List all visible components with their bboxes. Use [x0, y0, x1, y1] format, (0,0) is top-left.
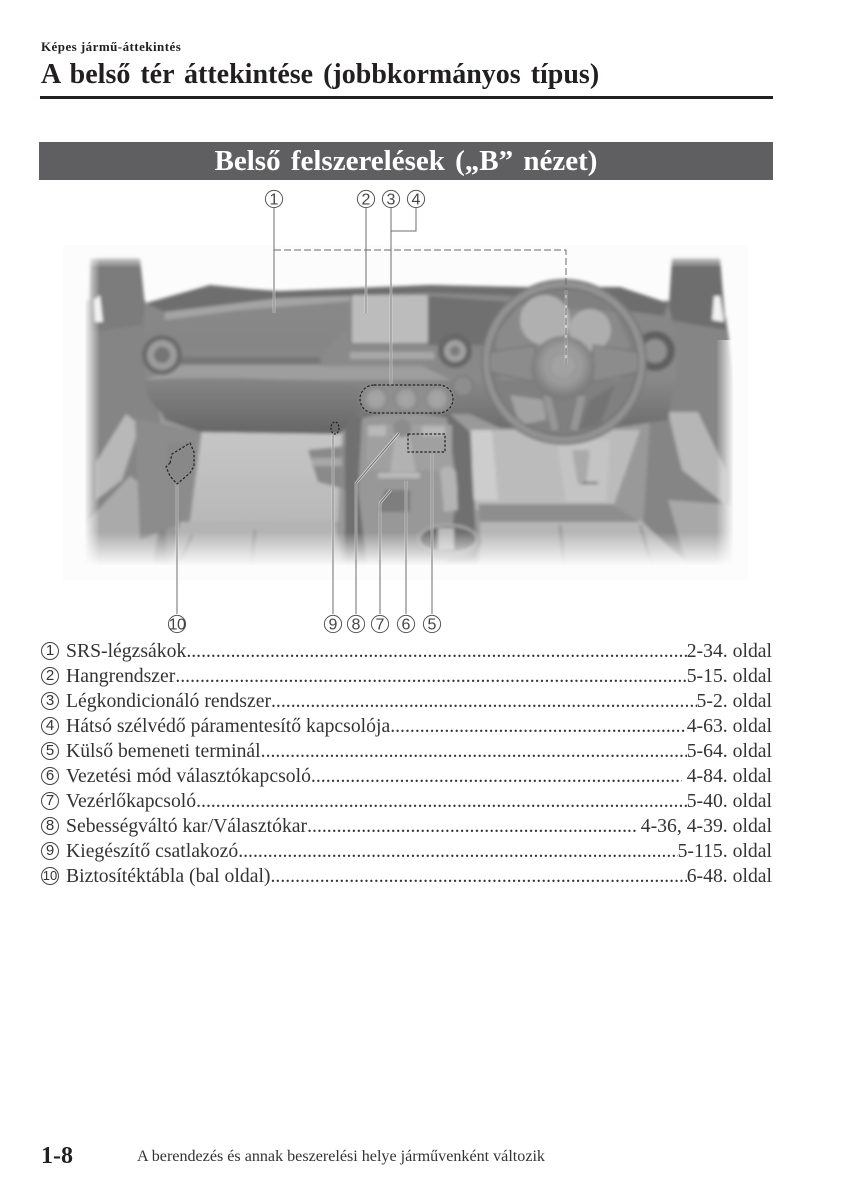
callout numbers — [168, 190, 441, 634]
glovebox — [142, 378, 362, 434]
footnote: A berendezés és annak beszerelési helye járművenként változik — [137, 1148, 545, 1165]
legend row 6: Vezetési mód választókapcsoló — [66, 765, 311, 787]
section label: Képes jármű-áttekintés — [41, 39, 181, 54]
callout 10: 10 — [169, 616, 186, 634]
callout 1 — [265, 190, 283, 208]
left air vent — [142, 335, 182, 375]
legend row 9: 5-115. oldal — [678, 840, 772, 862]
legend row 1: SRS-légzsákok — [66, 640, 186, 662]
centre stack trim — [320, 328, 460, 366]
legend row 3 — [41, 690, 772, 712]
dashed highlight: fuse block — [166, 443, 194, 484]
legend row 10: Biztosítéktábla (bal oldal) — [66, 865, 270, 887]
callout 5 — [423, 615, 441, 634]
legend row 2: 2 — [46, 667, 54, 684]
legend row 3: 3 — [46, 692, 54, 709]
legend row 2 — [41, 665, 772, 687]
shift boot — [390, 430, 416, 472]
small round switch — [453, 376, 473, 396]
page title: A belső tér áttekintése (jobbkormányos típus) — [41, 59, 599, 90]
centre console — [345, 414, 478, 575]
photo edge fades — [63, 250, 748, 580]
callout 9: 9 — [329, 616, 338, 634]
dashed highlight: accessory socket — [331, 422, 339, 434]
legend row 2: 5-15. oldal — [687, 665, 772, 687]
callout 3: 3 — [387, 192, 396, 208]
climate control panel — [360, 385, 453, 413]
legend row 2: Hangrendszer — [66, 665, 175, 687]
legend row 10: 10 — [43, 868, 57, 883]
lower cabin base — [84, 320, 738, 575]
legend row 1: 1 — [46, 642, 54, 659]
legend row 8: Sebességváltó kar/Választókar — [66, 815, 307, 837]
steering column backdrop — [486, 284, 642, 440]
callout 7 — [371, 615, 389, 634]
photo backdrop — [63, 245, 748, 576]
floor left — [190, 432, 342, 522]
legend row 5 — [41, 740, 772, 762]
legend row 7: 5-40. oldal — [687, 790, 772, 812]
callout 6 — [397, 615, 415, 634]
legend row 6 — [41, 765, 772, 787]
leader lines — [177, 208, 566, 614]
callout 2: 2 — [362, 192, 371, 208]
gauges — [520, 295, 570, 345]
middle air vent — [438, 334, 472, 368]
banner heading: Belső felszerelések („B” nézet) — [215, 145, 597, 177]
legend row 3: 5-2. oldal — [697, 690, 772, 712]
legend row 4: Hátsó szélvédő páramentesítő kapcsolója — [66, 715, 390, 737]
dashboard body — [145, 285, 680, 434]
legend row 7: 7 — [46, 792, 54, 809]
dash top band — [147, 285, 668, 316]
legend row 8 — [41, 815, 772, 837]
steering hub — [531, 336, 595, 400]
callout 1: 1 — [270, 192, 279, 208]
legend row 3: Légkondicionáló rendszer — [66, 690, 271, 712]
callout 3 — [382, 190, 400, 208]
dashed highlight: aux terminal — [408, 434, 445, 452]
callout 2 — [357, 190, 375, 208]
callout 4 — [407, 190, 425, 208]
page number: 1-8 — [41, 1143, 73, 1169]
dashed highlight: climate controls — [360, 385, 453, 413]
legend row 5: 5 — [46, 742, 54, 759]
legend row 1: 2-34. oldal — [687, 640, 772, 662]
callout 5: 5 — [428, 616, 437, 634]
callout 9 — [324, 615, 342, 634]
legend row 1 — [41, 640, 772, 662]
dash mid shelf — [180, 357, 345, 364]
diagram: dashboard interior with callouts — [85, 190, 733, 634]
cup holder — [419, 525, 481, 559]
legend row 7 — [41, 790, 772, 812]
legend row 6: 6 — [46, 767, 54, 784]
callout 8 — [347, 615, 365, 634]
legend row 10: 6-48. oldal — [687, 865, 772, 887]
steering wheel rim — [486, 284, 642, 440]
legend row 4: 4-63. oldal — [687, 715, 772, 737]
legend row 5: Külső bemeneti terminál — [66, 740, 261, 762]
legend row 9: 9 — [46, 842, 54, 859]
legend row 9 — [41, 840, 772, 862]
legend row 5: 5-64. oldal — [687, 740, 772, 762]
legend row 7: Vezérlőkapcsoló — [66, 790, 196, 812]
legend row 9: Kiegészítő csatlakozó — [66, 840, 238, 862]
legend row 8: 8 — [46, 817, 54, 834]
legend row 8: 4-36, 4-39. oldal — [641, 815, 772, 837]
screen — [352, 295, 428, 343]
legend list — [41, 640, 772, 887]
callout 8: 8 — [352, 616, 361, 634]
legend row 4 — [41, 715, 772, 737]
lower wheel gaps — [510, 395, 546, 425]
callout 4: 4 — [412, 192, 421, 208]
banner heading — [39, 142, 773, 180]
floor right with pedals — [470, 430, 640, 510]
callout 7: 7 — [376, 616, 385, 634]
legend row 4: 4 — [46, 717, 54, 734]
steering wheel spokes — [490, 345, 535, 382]
title rule — [40, 96, 773, 99]
right pillar — [668, 258, 726, 330]
legend row 6: 4-84. oldal — [687, 765, 772, 787]
seats — [170, 520, 345, 575]
hand brake — [440, 466, 458, 512]
far right air vent — [635, 331, 675, 371]
right door — [640, 300, 738, 575]
interior photo illustration — [84, 258, 738, 575]
callout 6: 6 — [402, 616, 411, 634]
left pedal box — [308, 446, 348, 490]
legend row 10 — [41, 865, 772, 887]
left pillar — [88, 258, 145, 332]
left door — [84, 300, 168, 575]
